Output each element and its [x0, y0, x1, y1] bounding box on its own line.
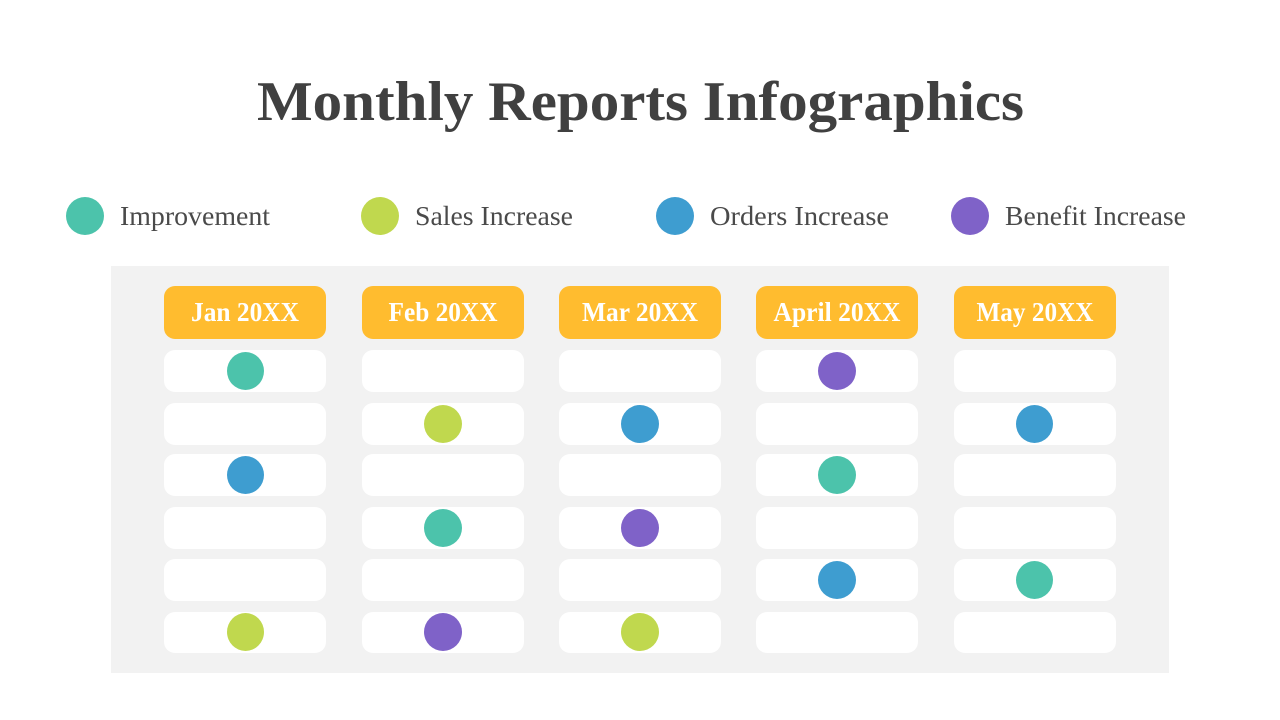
legend item: Sales Increase: [361, 197, 573, 235]
column: April 20XX: [756, 286, 918, 653]
column: Mar 20XX: [559, 286, 721, 653]
legend item: Benefit Increase: [951, 197, 1186, 235]
legend item: Orders Increase: [656, 197, 889, 235]
legend item: Improvement: Improvement: [120, 201, 270, 231]
column: May 20XX: May 20XX: [976, 297, 1094, 327]
column: April 20XX: April 20XX: [774, 297, 901, 327]
column: Feb 20XX: Feb 20XX: [388, 297, 498, 327]
column: Feb 20XX: [362, 286, 524, 653]
column: Jan 20XX: Jan 20XX: [191, 297, 299, 327]
legend item: Benefit Increase: Benefit Increase: [1005, 201, 1186, 231]
legend item: Orders Increase: Orders Increase: [710, 201, 889, 231]
legend: [66, 197, 1186, 235]
title: Monthly Reports Infographics: [257, 71, 1024, 133]
column: May 20XX: [954, 286, 1116, 653]
column: Mar 20XX: Mar 20XX: [582, 297, 698, 327]
column: Jan 20XX: [164, 286, 326, 653]
legend item: Sales Increase: Sales Increase: [415, 201, 573, 231]
panel: monthly grid: [111, 266, 1169, 673]
legend item: Improvement: [66, 197, 270, 235]
